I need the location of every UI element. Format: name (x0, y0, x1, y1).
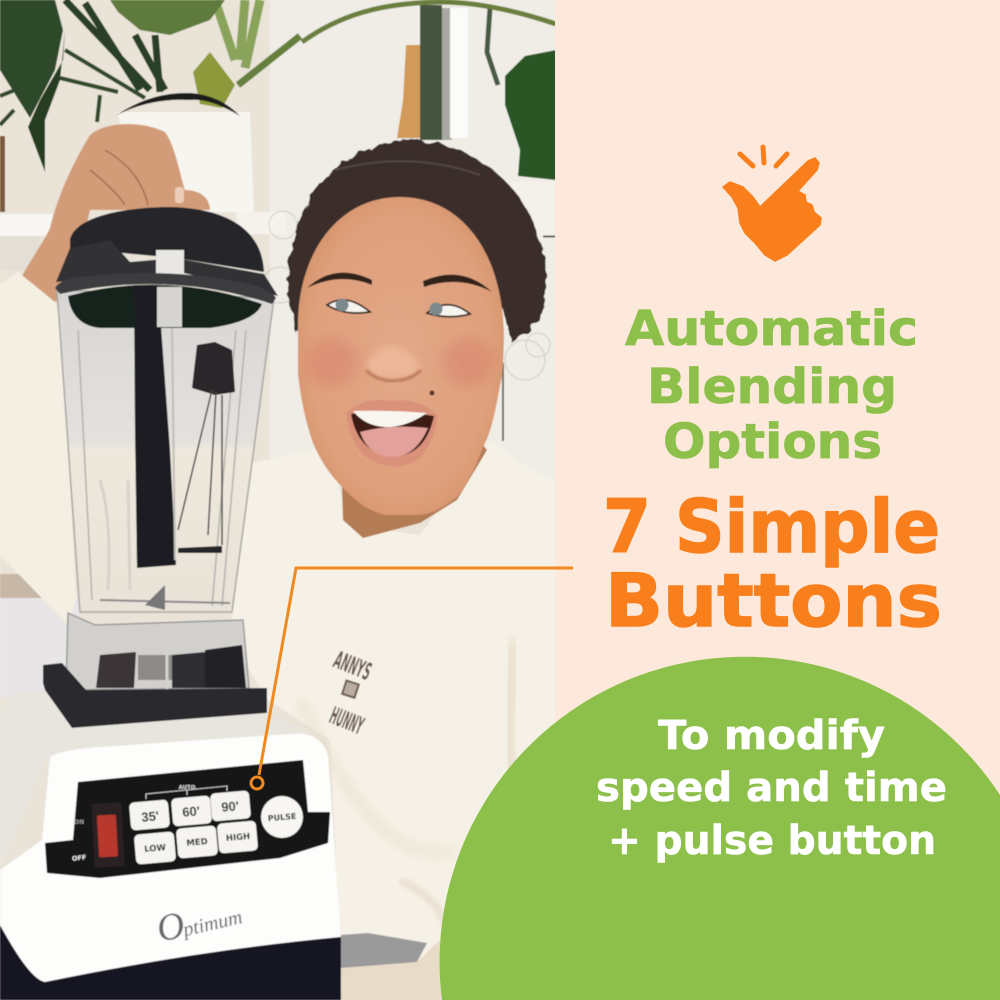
hair (288, 141, 547, 344)
blade guard (192, 342, 235, 395)
heading: 7 simple buttons (603, 485, 942, 644)
button med: MED (186, 837, 208, 849)
sweatshirt: HUNNY (326, 702, 368, 740)
wall background (0, 0, 556, 1000)
text: to modify speed and time + pulse button: speed and time (596, 765, 947, 811)
leaf, top right (505, 50, 556, 180)
waistband and trousers (340, 940, 442, 1000)
cheeks blush (306, 338, 494, 386)
heading: 7 simple buttons: Buttons (605, 559, 942, 644)
pulse button (261, 796, 303, 838)
arm and hand (20, 124, 210, 302)
button 60 (171, 795, 212, 827)
button 60: 60' (182, 803, 200, 820)
jar (57, 285, 274, 612)
photo panel: woman holding blender (0, 0, 556, 1000)
tamper shaft (134, 285, 176, 568)
button 90: 90' (221, 798, 239, 815)
heading: automatic blending options: Options (663, 414, 882, 470)
mouth (346, 400, 438, 466)
button low (134, 831, 176, 865)
button 90 (210, 790, 251, 822)
icon: snapping hand (723, 147, 821, 261)
eyebrows (307, 273, 492, 292)
sweatshirt print (328, 650, 373, 734)
jar collar (43, 663, 267, 728)
auto label (146, 785, 227, 799)
jar lid (56, 207, 278, 296)
arching plant stem (302, 2, 556, 42)
jar rim and dark interior (55, 273, 276, 330)
shelf (0, 212, 555, 442)
pulse button: PULSE (267, 812, 297, 823)
button high (217, 820, 258, 854)
wooden board (397, 45, 420, 138)
sweatshirt (0, 272, 556, 1000)
button high: HIGH (226, 832, 251, 844)
blender black bottom (0, 925, 341, 1000)
button 35: 35' (141, 808, 160, 825)
neck (342, 438, 487, 538)
nose (366, 346, 421, 381)
heading: 7 simple buttons: 7 Simple (603, 485, 940, 570)
blender housing (0, 733, 341, 982)
text: to modify speed and time + pulse button: To modify (658, 713, 885, 759)
string plant and window frame (420, 5, 498, 140)
plant pot (117, 93, 254, 212)
blender (0, 207, 341, 1000)
mole (430, 390, 434, 396)
buttons (129, 790, 303, 865)
heading: automatic blending options: Automatic (625, 301, 918, 357)
text: to modify speed and time + pulse button (596, 713, 947, 864)
background panel: peach (555, 0, 1000, 1000)
power switch: OFF (72, 853, 87, 863)
sweatshirt: ANNYS (330, 646, 375, 686)
hair wisps (262, 211, 550, 380)
jar lower base (66, 613, 249, 690)
brand script: Optimum (153, 891, 245, 951)
face (298, 197, 504, 515)
heading: automatic blending options: Blending (647, 359, 897, 415)
button med (176, 825, 218, 859)
eyes (327, 298, 470, 317)
text: to modify speed and time + pulse button: + pulse button (608, 818, 936, 864)
plants, top left (0, 0, 300, 212)
button 35 (129, 799, 170, 831)
blender base top (44, 690, 266, 729)
power switch: ON (74, 819, 84, 826)
callout line to buttons (251, 568, 573, 789)
heading: automatic blending options (625, 301, 918, 470)
button low: LOW (144, 843, 167, 855)
green circle panel (440, 657, 1000, 1000)
control panel (45, 760, 330, 878)
power switch (72, 802, 125, 868)
auto label: AUTO (179, 785, 196, 791)
